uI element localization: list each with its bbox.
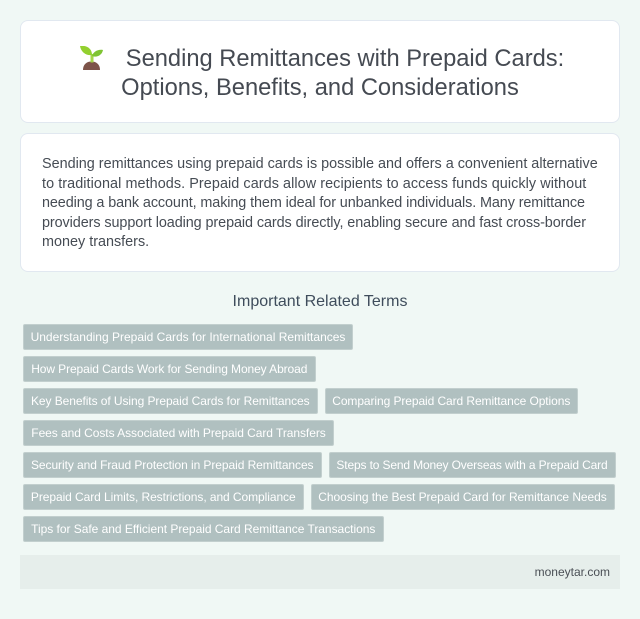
tag list bbox=[23, 324, 616, 542]
tag: Comparing Prepaid Card Remittance Options bbox=[332, 394, 570, 408]
tag: Prepaid Card Limits, Restrictions, and Compliance bbox=[31, 490, 296, 504]
tag: How Prepaid Cards Work for Sending Money Abroad bbox=[31, 362, 307, 376]
tag bbox=[23, 484, 304, 510]
tag: Steps to Send Money Overseas with a Prepaid Card bbox=[336, 458, 608, 472]
intro paragraph bbox=[42, 156, 598, 250]
title bbox=[121, 46, 564, 101]
panel: title card bbox=[20, 20, 620, 123]
footer source: moneytar.com bbox=[535, 565, 610, 579]
tag: Tips for Safe and Efficient Prepaid Card Remittance Transactions bbox=[31, 522, 375, 536]
tag bbox=[328, 452, 616, 478]
intro paragraph: to traditional methods. Prepaid cards allow recipients to access funds quickly without bbox=[42, 176, 586, 192]
tag bbox=[23, 452, 322, 478]
tag: Understanding Prepaid Cards for International Remittances bbox=[31, 330, 345, 344]
tag bbox=[23, 388, 318, 414]
intro paragraph: Sending remittances using prepaid cards is possible and offers a convenient alternative bbox=[42, 156, 598, 172]
tag bbox=[23, 324, 353, 350]
footer bar bbox=[20, 555, 620, 589]
title: Options, Benefits, and Considerations bbox=[121, 75, 519, 101]
tag: Key Benefits of Using Prepaid Cards for Remittances bbox=[31, 394, 310, 408]
tag bbox=[324, 388, 578, 414]
panel: intro text bbox=[20, 133, 620, 272]
tag: Security and Fraud Protection in Prepaid Remittances bbox=[31, 458, 314, 472]
title: Sending Remittances with Prepaid Cards: bbox=[126, 46, 564, 72]
tag: Fees and Costs Associated with Prepaid Card Transfers bbox=[31, 426, 326, 440]
tag bbox=[23, 356, 316, 382]
tag bbox=[23, 516, 384, 542]
icon: seedling bbox=[80, 46, 103, 70]
intro paragraph: providers support loading prepaid cards directly, enabling secure and fast cross-border bbox=[42, 214, 586, 230]
tag: Choosing the Best Prepaid Card for Remittance Needs bbox=[318, 490, 607, 504]
tag bbox=[310, 484, 614, 510]
intro paragraph: money transfers. bbox=[42, 234, 149, 250]
tag bbox=[23, 420, 334, 446]
heading: related terms: Important Related Terms bbox=[233, 293, 407, 310]
intro paragraph: needing a bank account, making them ideal for unbanked individuals. Many remittance bbox=[42, 195, 585, 211]
